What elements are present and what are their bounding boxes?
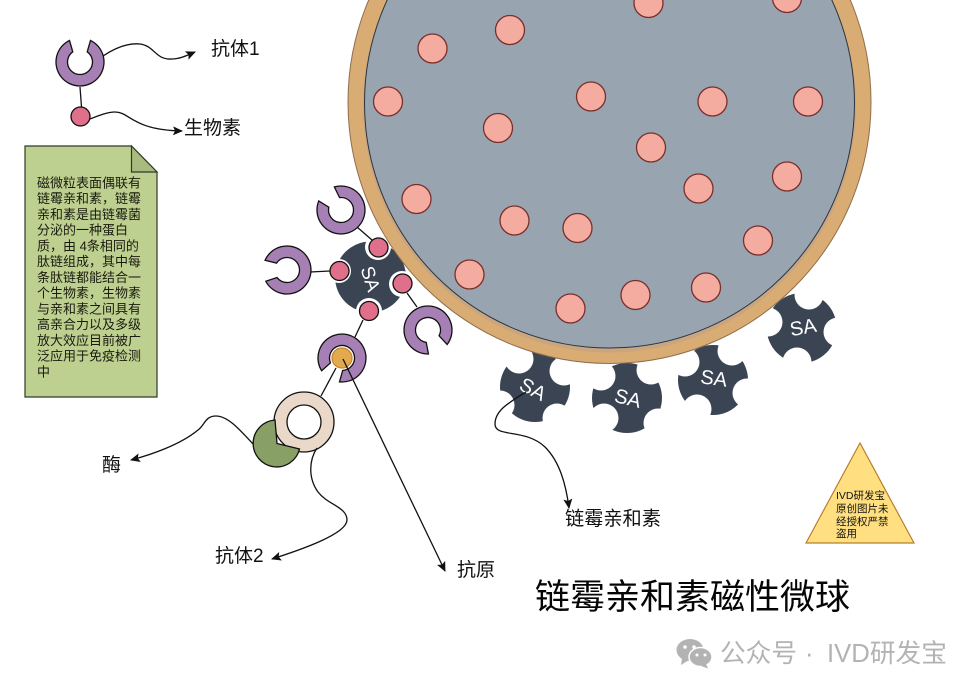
note text: 磁微粒表面偶联有 (37, 176, 141, 190)
note text: 分泌的一种蛋白 (37, 223, 128, 238)
label: antibody 1: 抗体1 (211, 38, 260, 60)
antibody on complex: bottom (310, 325, 375, 389)
note text: 泛应用于免疫检测 (37, 349, 141, 364)
arrow: antigen label (343, 359, 445, 571)
copyright text: IVD研发宝 (836, 489, 885, 502)
streptavidin on bead surface 2: SA (612, 385, 644, 413)
arrow: enzyme label (131, 416, 253, 460)
enzyme (253, 420, 300, 467)
label: biotin: 生物素 (184, 117, 241, 139)
legend connector: antibody to biotin (80, 87, 82, 107)
note text: 与亲和素之间具有 (37, 302, 141, 316)
streptavidin on bead surface 4 (754, 280, 852, 376)
copyright triangle (806, 443, 914, 543)
arrow: streptavidin label (495, 392, 569, 508)
streptavidin on bead surface 3: SA (699, 366, 729, 392)
central streptavidin complex core (327, 234, 415, 324)
label: streptavidin: 链霉亲和素 (565, 508, 661, 530)
note text: 个生物素，生物素 (37, 286, 141, 301)
legend icon: biotin (71, 107, 90, 126)
arrow: antibody 2 label (272, 448, 347, 559)
label: enzyme: 酶 (102, 454, 121, 476)
streptavidin on bead surface 1: SA (516, 374, 550, 406)
label: antigen: 抗原 (457, 559, 495, 581)
note text: 中 (37, 364, 50, 380)
antibody on complex: top (309, 178, 375, 244)
title: 链霉亲和素磁性微球 (535, 578, 850, 617)
note text: 肽链组成，其中每 (37, 254, 141, 269)
copyright text: 经授权严禁 (836, 515, 889, 528)
antibody 2 ring (274, 392, 334, 452)
streptavidin on bead surface 2 (586, 356, 672, 438)
antibody on complex: right (396, 298, 459, 360)
complex connectors (310, 227, 417, 396)
antigen (332, 348, 352, 368)
copyright text: 盗用 (836, 527, 857, 540)
watermark text: IVD研发宝 (827, 639, 947, 668)
copyright text: 原创图片未 (836, 502, 889, 515)
note text: 放大效应目前被广 (37, 333, 141, 348)
note text: 质，由 4条相同的 (37, 238, 139, 254)
bead surface particles (374, 0, 822, 323)
note text: 亲和素是由链霉菌 (37, 207, 141, 222)
biotin molecules on complex (330, 238, 412, 320)
streptavidin on bead surface 3 (670, 336, 762, 424)
magnetic bead (348, 0, 871, 364)
legend icon: antibody 1 (56, 40, 104, 86)
label: antibody 2: 抗体2 (215, 545, 264, 567)
note text: 链霉亲和素，链霉 (37, 191, 141, 206)
central streptavidin complex core: SA (356, 264, 384, 295)
arrow: antibody 1 label (103, 44, 195, 59)
watermark icon (676, 639, 712, 668)
antibody on complex: left (265, 245, 312, 295)
arrow: biotin label (90, 112, 182, 131)
watermark text: 公众号 (720, 640, 797, 668)
note panel (25, 146, 157, 397)
note text: 高亲合力以及多级 (37, 317, 141, 332)
streptavidin on bead surface 4: SA (788, 315, 819, 341)
watermark text: · (805, 640, 814, 668)
note text: 条肽链都能结合一 (37, 270, 141, 285)
streptavidin on bead surface 1 (486, 344, 578, 432)
